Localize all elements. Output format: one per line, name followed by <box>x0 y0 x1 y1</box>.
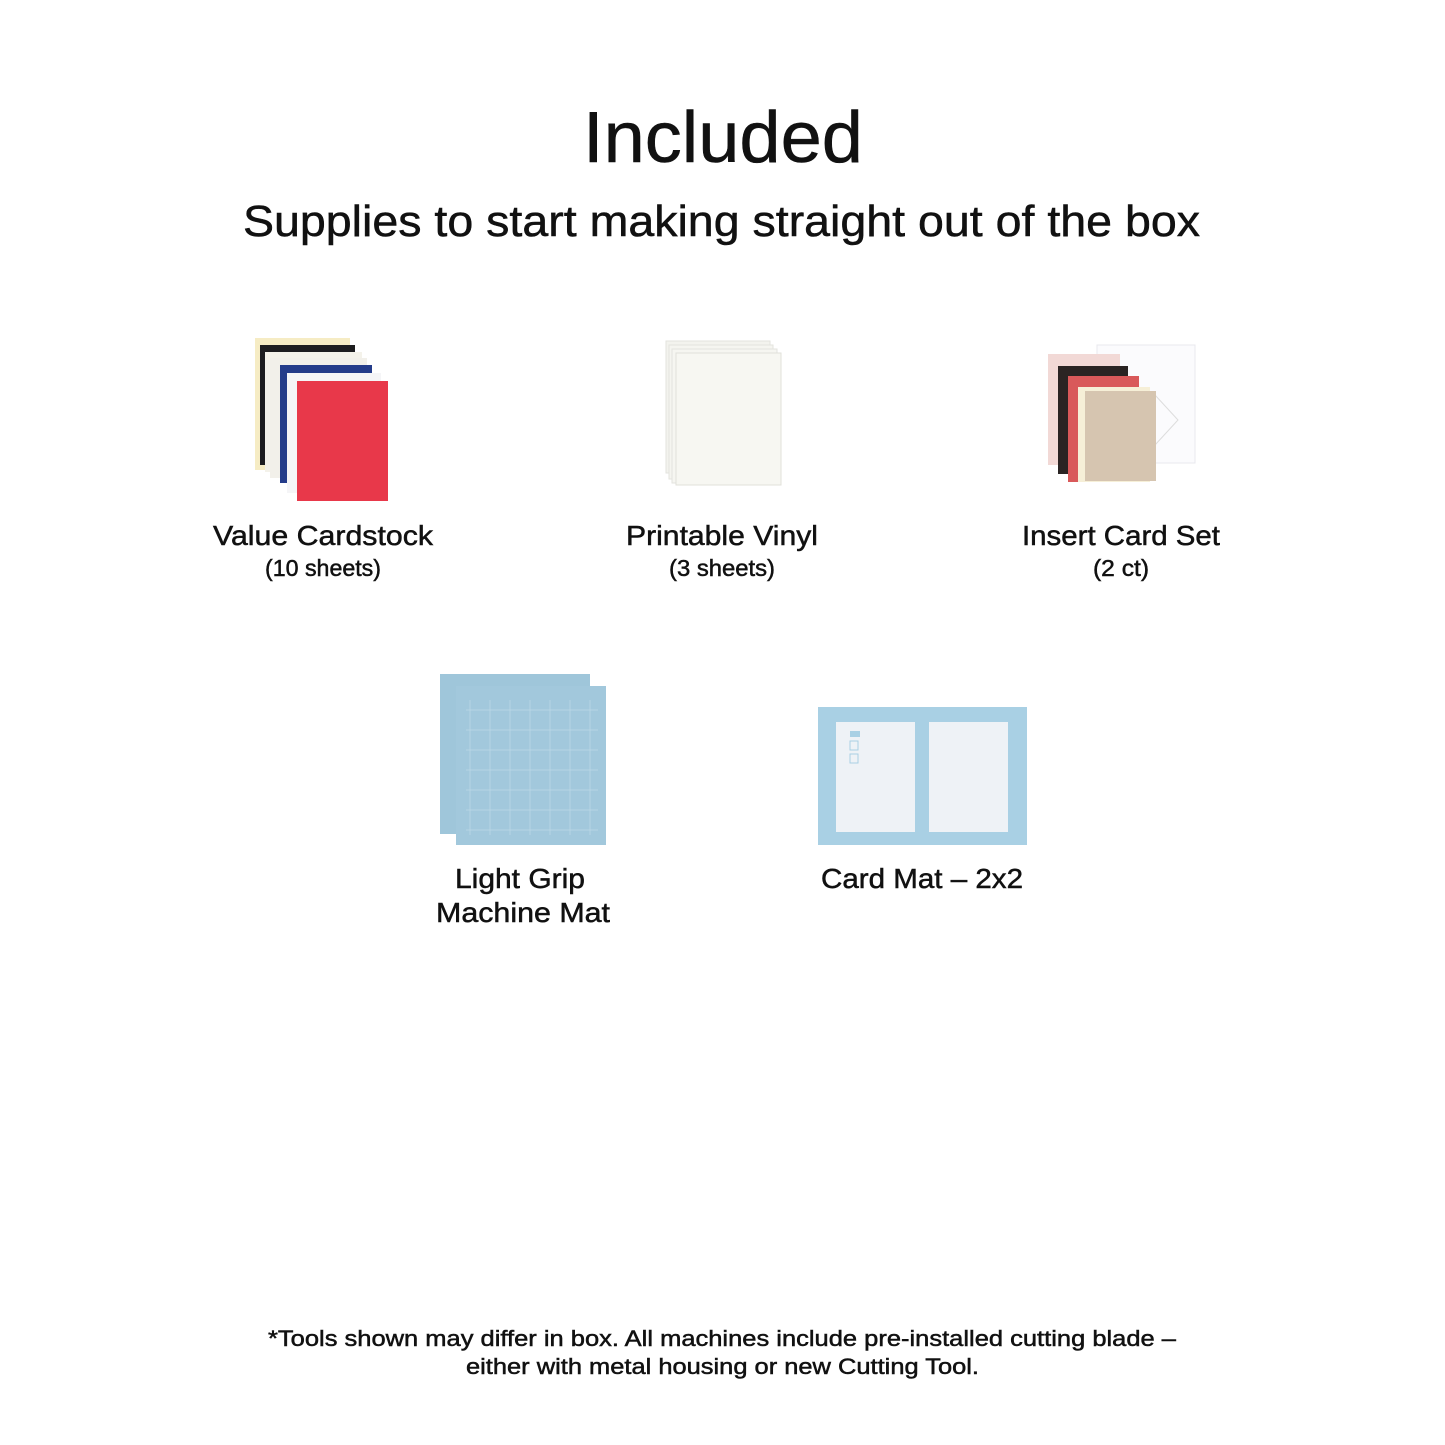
item: printable vinyl <box>626 341 818 581</box>
label: card mat 2x2: Card Mat – 2x2 <box>821 863 1023 894</box>
footer note: either with metal housing or new Cutting Tool. <box>466 1354 979 1379</box>
icon: light grip mats <box>440 674 606 845</box>
footer note <box>268 1326 1177 1379</box>
item: insert card set: (2 ct) <box>1093 555 1149 581</box>
icon: cardstock stack <box>255 338 388 501</box>
item: value cardstock: (10 sheets) <box>265 555 381 581</box>
footer note: *Tools shown may differ in box. All machines include pre-installed cutting blade – <box>268 1326 1177 1351</box>
item: light grip machine mat <box>436 674 610 928</box>
item: card mat 2x2 <box>818 707 1027 894</box>
subtitle: Supplies to start making straight out of the box <box>243 197 1200 246</box>
label: light grip machine mat: Light Grip <box>455 863 585 894</box>
icon: card mat <box>818 707 1027 845</box>
icon: insert cards and envelopes <box>1048 345 1195 482</box>
item: printable vinyl: (3 sheets) <box>669 555 775 581</box>
icon: vinyl sheets <box>666 341 781 485</box>
item: light grip machine mat: Machine Mat <box>436 897 610 928</box>
item: value cardstock <box>213 338 434 581</box>
label: value cardstock: Value Cardstock <box>213 520 434 551</box>
item: insert card set <box>1022 345 1220 581</box>
title: Included <box>583 98 863 178</box>
label: insert card set: Insert Card Set <box>1022 520 1220 551</box>
label: printable vinyl: Printable Vinyl <box>626 520 818 551</box>
